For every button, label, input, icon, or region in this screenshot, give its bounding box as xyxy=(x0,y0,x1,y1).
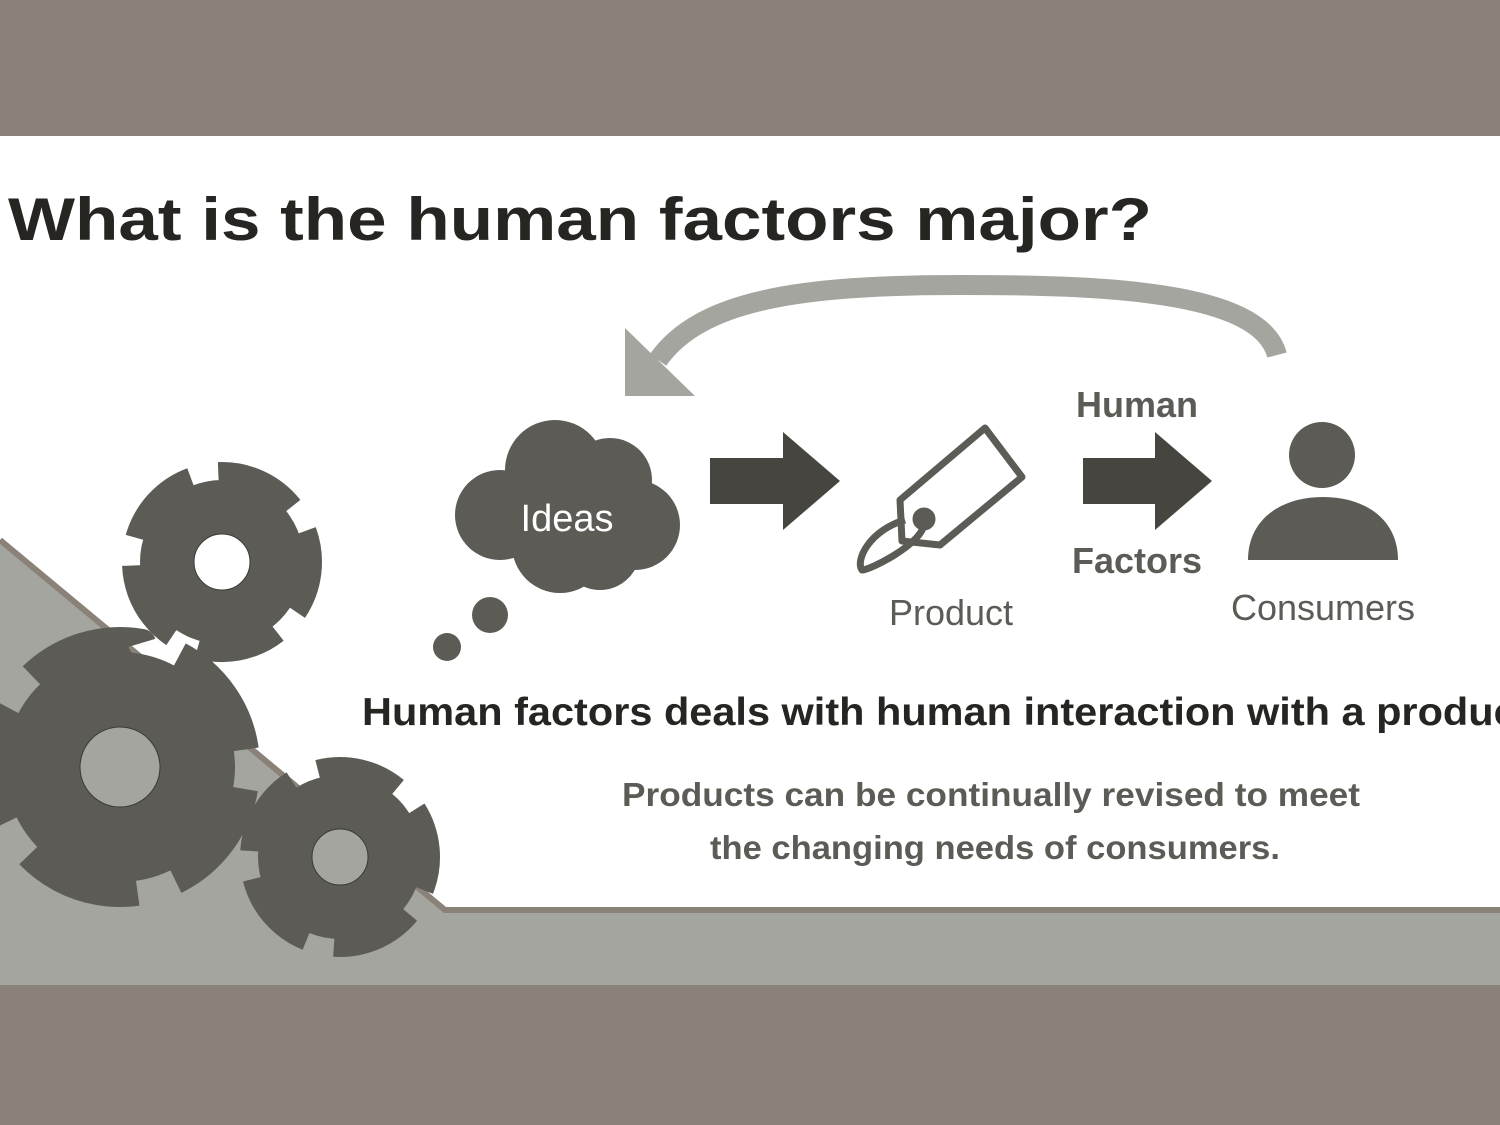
sub statement: the changing needs of consumers. xyxy=(710,829,1280,866)
label: human factors: Human xyxy=(1076,384,1198,425)
icon: ideas cloud: Ideas xyxy=(521,498,613,540)
gear: large xyxy=(0,621,266,913)
top band xyxy=(0,0,1500,136)
label: human factors: Factors xyxy=(1072,540,1202,581)
arrow: ideas to product xyxy=(710,432,840,530)
gray floor with diagonal xyxy=(0,540,1500,985)
gear: top xyxy=(107,447,337,677)
white panel xyxy=(0,136,1500,916)
label: product: Product xyxy=(889,592,1013,633)
gear: small bottom xyxy=(213,730,467,984)
sub statement: Products can be continually revised to meet xyxy=(622,776,1360,813)
icon: ideas cloud xyxy=(433,420,680,661)
bottom band xyxy=(0,985,1500,1125)
icon: consumer person xyxy=(1248,422,1398,560)
main statement: Human factors deals with human interaction with a product. xyxy=(362,691,1500,734)
curved feedback arrow xyxy=(625,285,1277,396)
sub statement xyxy=(622,776,1360,866)
icon: product tag xyxy=(860,428,1022,570)
label: human factors xyxy=(1072,384,1202,581)
label: consumers: Consumers xyxy=(1231,587,1415,628)
title: What is the human factors major? xyxy=(8,186,1152,253)
arrow: product to consumers xyxy=(1083,432,1212,530)
